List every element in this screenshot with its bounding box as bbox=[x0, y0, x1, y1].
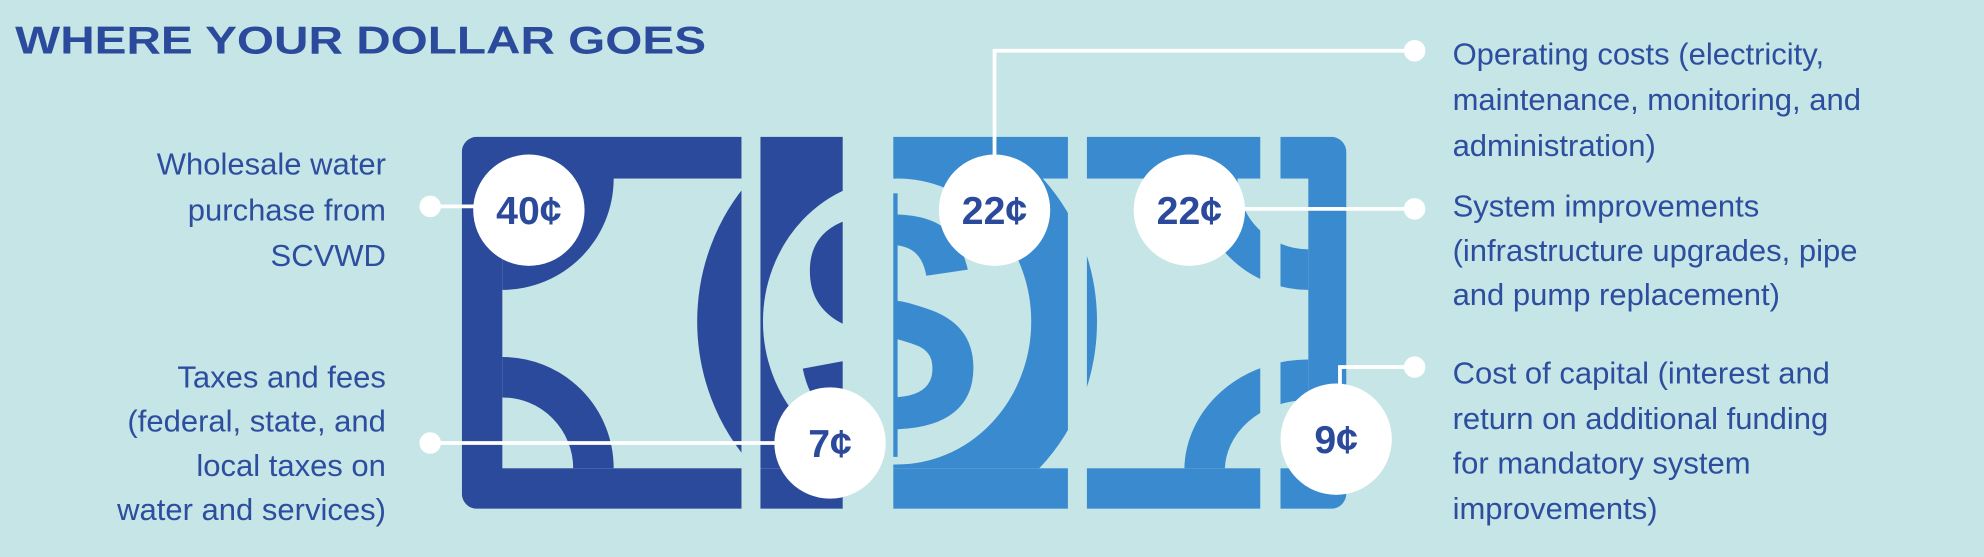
text: taxes and fees: local taxes on bbox=[196, 448, 386, 483]
leader lines bbox=[421, 42, 1423, 452]
text: cost of capital: return on additional funding bbox=[1453, 401, 1828, 436]
text: system improvements: System improvements bbox=[1453, 189, 1759, 224]
badge: 40 cents: 40¢ bbox=[496, 189, 562, 233]
badge: 22 cents system bbox=[1134, 154, 1245, 266]
text: cost of capital: for mandatory system bbox=[1453, 445, 1751, 480]
badge: 22 cents system: 22¢ bbox=[1157, 189, 1222, 233]
text: taxes and fees bbox=[116, 359, 386, 527]
text: system improvements bbox=[1453, 188, 1858, 312]
title: WHERE YOUR DOLLAR GOES bbox=[15, 18, 706, 62]
text: operating costs: Operating costs (electricity, bbox=[1453, 37, 1824, 72]
text: cost of capital: improvements) bbox=[1453, 491, 1658, 526]
icon: dollar sign bbox=[802, 193, 974, 457]
text: operating costs: administration) bbox=[1453, 128, 1656, 163]
text: taxes and fees: (federal, state, and bbox=[127, 404, 386, 439]
text: taxes and fees: water and services) bbox=[116, 492, 386, 527]
icon: dollar sign: $ bbox=[799, 142, 978, 502]
badge: 9 cents bbox=[1280, 384, 1392, 495]
badge: 22 cents operating: 22¢ bbox=[962, 189, 1027, 233]
dollar bill graphic bbox=[462, 136, 1346, 509]
badge: 22 cents operating bbox=[939, 154, 1050, 266]
badge: 40 cents bbox=[473, 154, 585, 266]
icon: dollar sign: $ bbox=[799, 142, 978, 502]
text: operating costs bbox=[1453, 37, 1861, 163]
text: wholesale water: SCVWD bbox=[271, 238, 386, 273]
text: cost of capital bbox=[1453, 356, 1830, 526]
text: wholesale water: Wholesale water bbox=[157, 147, 386, 182]
text: operating costs: maintenance, monitoring, and bbox=[1453, 82, 1861, 117]
badge: 7 cents: 7¢ bbox=[808, 422, 852, 466]
text: system improvements: (infrastructure upgrades, pipe bbox=[1453, 233, 1858, 268]
badge: 7 cents bbox=[774, 387, 886, 499]
text: system improvements: and pump replacement) bbox=[1453, 277, 1780, 312]
text: taxes and fees: Taxes and fees bbox=[177, 359, 386, 394]
central ring bbox=[697, 178, 843, 468]
badge: 9 cents: 9¢ bbox=[1314, 418, 1358, 462]
text: wholesale water bbox=[157, 147, 386, 273]
text: cost of capital: Cost of capital (interest and bbox=[1453, 356, 1830, 391]
text: wholesale water: purchase from bbox=[188, 192, 386, 227]
